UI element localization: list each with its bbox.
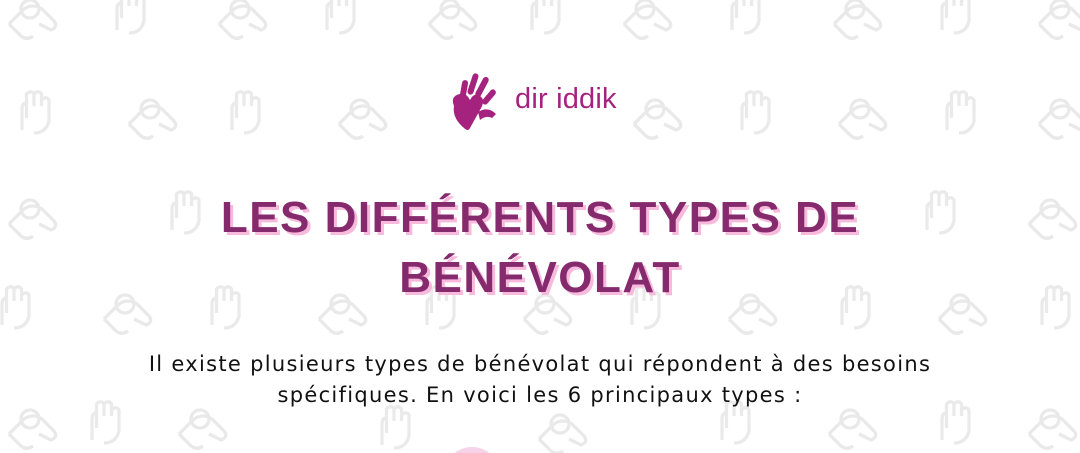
subtitle text: spécifiques. En voici les 6 principaux types : (278, 383, 802, 407)
title (221, 193, 859, 302)
title: LES DIFFÉRENTS TYPES DE (221, 193, 859, 242)
subtitle text (149, 352, 931, 407)
logo (452, 73, 617, 130)
title: BÉNÉVOLAT (399, 253, 681, 302)
pink circle peeking at bottom (444, 447, 500, 453)
logo: dir iddik (515, 83, 617, 115)
subtitle text: Il existe plusieurs types de bénévolat qui répondent à des besoins (149, 352, 931, 376)
icon: heart hand (452, 73, 496, 130)
